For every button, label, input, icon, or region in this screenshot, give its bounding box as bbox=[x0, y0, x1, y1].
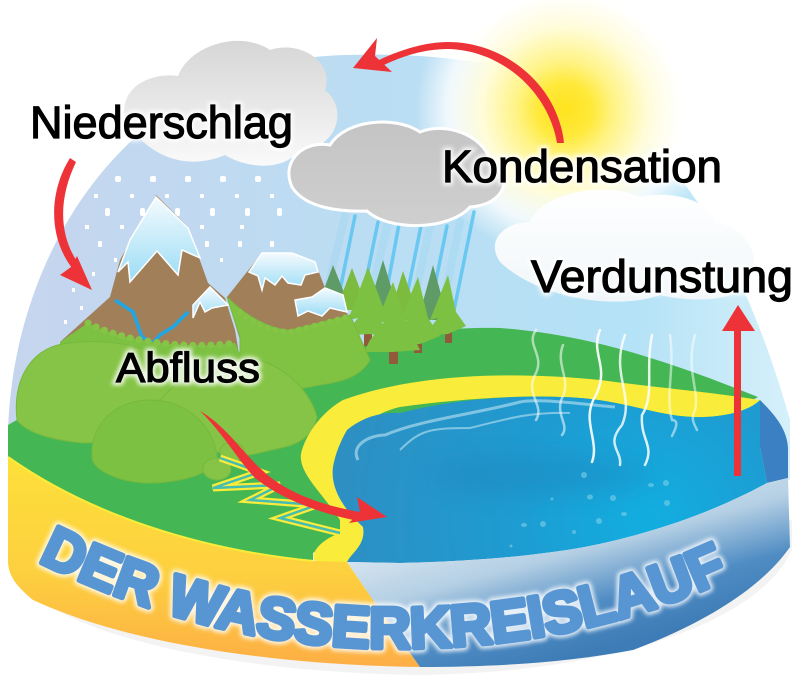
label: Verdunstung: Verdunstung bbox=[531, 251, 793, 302]
lake dark patch bbox=[430, 455, 650, 495]
foot dots right bbox=[240, 312, 350, 332]
land surface bbox=[8, 385, 345, 560]
arrow: precipitation to land bbox=[54, 158, 92, 290]
hill: front bbox=[92, 400, 217, 483]
hill: back left bbox=[16, 342, 220, 443]
wall: water side bbox=[347, 478, 790, 667]
mountains bbox=[60, 195, 350, 393]
label: Kondensation: Kondensation bbox=[442, 141, 722, 192]
sand shore bbox=[301, 375, 760, 562]
evaporation steam bbox=[532, 330, 697, 465]
arrow: evaporation bbox=[722, 305, 755, 476]
cloud: Niederschlag bbox=[124, 41, 337, 166]
hill: right bbox=[160, 358, 317, 455]
label: Abfluss: Abfluss bbox=[116, 344, 260, 391]
base wall bbox=[8, 457, 790, 667]
drain stream zigzag bbox=[213, 458, 340, 533]
title: DER WASSERKREISLAUF bbox=[34, 518, 729, 656]
bubbles bbox=[510, 472, 670, 548]
mountain: large bbox=[60, 195, 240, 393]
arrow: condensation to precipitation bbox=[353, 38, 564, 143]
lake side edge bbox=[760, 400, 788, 483]
wall: sand side bbox=[8, 457, 420, 667]
lake waves bbox=[356, 401, 615, 460]
cloud: Verdunstung bbox=[495, 190, 754, 302]
rain streaks bbox=[325, 212, 474, 320]
lake bbox=[333, 397, 767, 563]
hills bbox=[16, 297, 370, 483]
mountain: small bbox=[227, 253, 350, 345]
cloud: Kondensation bbox=[289, 122, 504, 226]
sky dome bbox=[8, 55, 790, 480]
label: Abfluss: Abfluss bbox=[116, 344, 260, 391]
hill: back right bbox=[227, 297, 370, 400]
label: Verdunstung: Verdunstung bbox=[531, 251, 793, 302]
arrow: runoff into lake bbox=[200, 411, 387, 523]
snowfall bbox=[64, 176, 282, 324]
label: Kondensation: Kondensation bbox=[442, 141, 722, 192]
label: Niederschlag: Niederschlag bbox=[30, 97, 293, 148]
hill: under mountain bbox=[60, 323, 262, 440]
base shadow bbox=[8, 520, 792, 675]
title: DER WASSERKREISLAUF bbox=[38, 524, 724, 651]
trees bbox=[320, 260, 466, 364]
tree back row bbox=[320, 260, 448, 320]
sun bbox=[415, 0, 715, 260]
mountain foot dots bbox=[88, 323, 235, 345]
label: Niederschlag: Niederschlag bbox=[30, 97, 293, 148]
far meadow bbox=[300, 328, 758, 450]
